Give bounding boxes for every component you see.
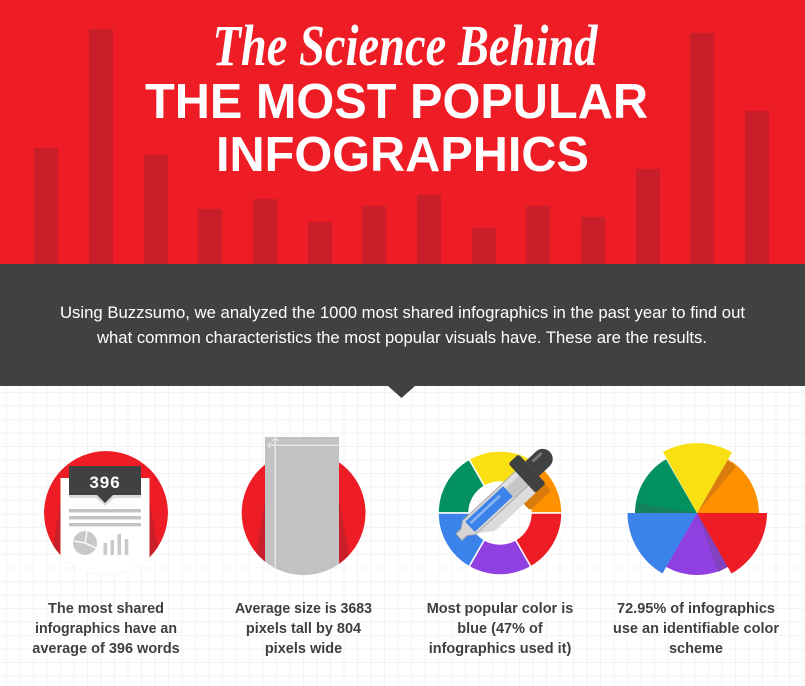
caption: color scheme: use an identifiable color — [613, 621, 779, 637]
grid background — [0, 386, 805, 686]
caption: popular color — [427, 601, 573, 657]
caption: color scheme: scheme — [669, 641, 723, 657]
icon: color wheel with dropper — [438, 437, 570, 575]
caption: word count: average of 396 words — [32, 641, 180, 657]
title: THE MOST POPULAR — [145, 75, 648, 129]
caption: average size: pixels tall by 804 — [246, 621, 361, 637]
icon: color scheme wheel — [628, 443, 767, 575]
caption: average size — [235, 601, 372, 657]
decorative bar chart — [34, 29, 769, 264]
intro band: Using Buzzsumo, we analyzed the 1000 most shared infographics in the past year to find out — [60, 304, 745, 322]
caption: word count: infographics have an — [35, 621, 177, 637]
caption: word count: The most shared — [48, 601, 164, 617]
caption: color scheme: 72.95% of infographics — [617, 601, 775, 617]
caption: popular color: Most popular color is — [427, 601, 573, 617]
caption: word count — [32, 601, 180, 657]
caption: average size: pixels wide — [265, 641, 342, 657]
icon: document with word count — [44, 451, 168, 580]
intro band: what common characteristics the most popular visuals have. These are the results. — [96, 329, 707, 347]
icon: dropper — [445, 437, 570, 558]
title — [145, 13, 648, 182]
title: The Science Behind — [212, 13, 598, 78]
icon: tall page size — [242, 437, 366, 582]
header panel — [0, 0, 805, 264]
caption: average size: Average size is 3683 — [235, 601, 372, 617]
title: INFOGRAPHICS — [216, 128, 589, 182]
caption: color scheme — [613, 601, 779, 657]
caption: popular color: infographics used it) — [429, 641, 571, 657]
caption: popular color: blue (47% of — [457, 621, 543, 637]
intro band — [0, 264, 805, 398]
icon: document with word count: 396 — [89, 473, 121, 492]
